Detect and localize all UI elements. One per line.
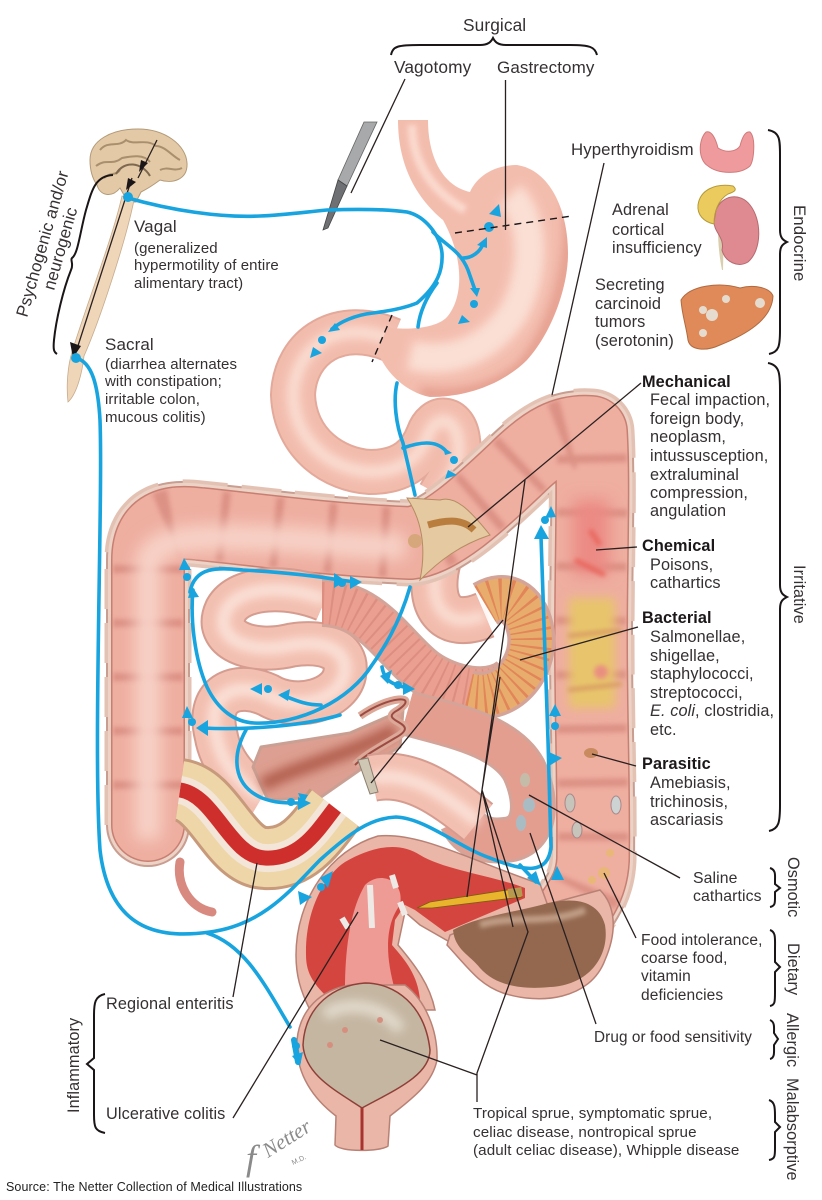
text: hyperthyroidism: Hyperthyroidism: [571, 140, 694, 159]
organ: ileum section: [253, 710, 403, 800]
regional enteritis: [180, 790, 335, 858]
text: bacterial: Salmonellae,: [650, 628, 745, 646]
cecum and appendix: [179, 862, 212, 912]
ileocecal clamp: [358, 758, 378, 794]
text: carcinoid: Secreting: [595, 276, 665, 294]
text: food intolerance: Food intolerance,: [641, 932, 762, 949]
organ: inflamed jejunum: [468, 599, 531, 696]
text: mechanical: Fecal impaction,: [650, 391, 770, 409]
organ: pale loop upper right: [434, 560, 485, 620]
text: bacterial: etc.: [650, 721, 677, 739]
text: mechanical: compression,: [650, 484, 748, 502]
text: bacterial: streptococci,: [650, 684, 743, 702]
text: bacterial: shigellae,: [650, 647, 720, 665]
text: chemical: Poisons,: [650, 556, 713, 574]
signature: Netter: [257, 1114, 316, 1163]
organ: ulcerative colitis rectosigmoid: [296, 836, 548, 1010]
text: bacterial: [642, 609, 774, 739]
signature: M.D.: [291, 1154, 308, 1167]
label inflammatory: Inflammatory: [65, 1017, 83, 1113]
text: mechanical: extraluminal: [650, 466, 739, 484]
text: mechanical: intussusception,: [650, 447, 768, 465]
text: bacterial: Bacterial: [642, 609, 712, 627]
text: bacterial: staphylococci,: [650, 665, 754, 683]
signature: f: [246, 1138, 261, 1178]
text: mechanical: foreign body,: [650, 410, 744, 428]
organ: stomach: [377, 120, 569, 397]
colon: bacterial inflammation: [568, 598, 622, 708]
icon: liver with carcinoid: [681, 285, 773, 349]
text: parasitic: trichinosis,: [650, 793, 728, 811]
brain: [90, 129, 187, 202]
text: mechanical: Mechanical: [642, 373, 731, 391]
brace malabsorptive: [769, 1100, 780, 1160]
heading: surgical: Surgical: [463, 15, 526, 35]
text: carcinoid: (serotonin): [595, 332, 674, 350]
text: bacterial: E. coli, clostridia,: [650, 702, 774, 720]
text: sacral: Sacral: [105, 335, 154, 354]
colon: mechanical obstruction tumor: [407, 498, 490, 580]
text: vagal: Vagal: [134, 217, 177, 236]
text: sacral: [104, 335, 237, 426]
text: chemical: cathartics: [650, 574, 721, 592]
text: adrenal: [612, 201, 702, 257]
text: adrenal: insufficiency: [612, 239, 702, 257]
organ: bladder shaped rectum: [297, 983, 437, 1150]
text: food intolerance: deficiencies: [641, 987, 723, 1004]
leader lines: [233, 79, 680, 1118]
text: carcinoid: carcinoid: [595, 295, 661, 313]
text: malabsorptive causes: (adult celiac disease), Whipple disease: [473, 1142, 739, 1159]
brace inflammatory: [87, 994, 105, 1133]
text: malabsorptive causes: [473, 1105, 739, 1159]
label malabsorptive: Malabsorptive: [783, 1078, 801, 1181]
heading: surgical: Gastrectomy: [497, 58, 595, 77]
label endocrine: Endocrine: [790, 205, 809, 281]
text: mechanical: neoplasm,: [650, 428, 726, 446]
colon: parasites and ulcers: [565, 748, 621, 884]
text: parasitic: Amebiasis,: [650, 774, 731, 792]
label: neurogenic: neurogenic: [40, 205, 81, 292]
text: vagal: (generalized: [134, 240, 218, 257]
heading: surgical: Vagotomy: [394, 57, 472, 77]
organ: ribbed small intestine: [322, 603, 512, 690]
text: vagal: hypermotility of entire: [134, 257, 279, 274]
organ: duodenum: [293, 332, 459, 495]
text: sacral: (diarrhea alternates: [105, 356, 237, 373]
text: regional enteritis: Regional enteritis: [106, 995, 234, 1013]
brace irritative: [768, 363, 787, 831]
worm parasites in ileum: [516, 773, 535, 831]
organ: intussusception fold: [355, 699, 406, 765]
blue arrowheads and nodes: [71, 192, 564, 1066]
text: ulcerative colitis: Ulcerative colitis: [106, 1105, 225, 1123]
text: parasitic: ascariasis: [650, 811, 723, 829]
brace: psychogenic: [54, 175, 113, 354]
spinal cord: [67, 196, 134, 402]
text: food intolerance: [641, 932, 762, 1004]
text: food intolerance: coarse food,: [641, 950, 728, 967]
text: mechanical: [642, 373, 770, 520]
text: mechanical: angulation: [650, 502, 726, 520]
label dietary: Dietary: [784, 943, 802, 996]
brace allergic: [770, 1020, 778, 1059]
text: adrenal: cortical: [612, 221, 664, 239]
text: carcinoid: tumors: [595, 313, 645, 331]
text: adrenal: Adrenal: [612, 201, 669, 219]
text: chemical: Chemical: [642, 537, 715, 555]
text: sacral: with constipation;: [104, 373, 222, 390]
text: sacral: mucous colitis): [105, 409, 206, 426]
dashed resection lines: [372, 216, 572, 362]
text: saline cathartics: Saline: [693, 870, 738, 887]
text: sacral: irritable colon,: [105, 391, 200, 408]
icon: adrenal and kidney: [698, 185, 759, 270]
label: psychogenic: Psychogenic and/or: [13, 168, 73, 319]
text: saline cathartics: cathartics: [693, 888, 762, 905]
text: food intolerance: vitamin: [641, 968, 691, 985]
organ: lower ileum: [407, 713, 533, 840]
blue autonomic pathways: [71, 192, 564, 1066]
organ: pale ileum segment: [372, 776, 478, 822]
nerve pathway arrows: [70, 140, 157, 358]
label allergic: Allergic: [783, 1013, 801, 1067]
organ: colon: [148, 432, 593, 915]
heading: surgical: [391, 15, 597, 77]
text: saline cathartics: [693, 870, 762, 905]
text: parasitic: [642, 755, 731, 829]
text: malabsorptive causes: celiac disease, nontropical sprue: [473, 1124, 697, 1141]
organ: pale small intestine loop: [214, 590, 345, 797]
text: drug sensitivity: Drug or food sensitivity: [594, 1029, 752, 1046]
scalpel: [323, 122, 377, 230]
text: carcinoid: [595, 276, 674, 350]
label osmotic: Osmotic: [784, 857, 802, 917]
icon: thyroid: [700, 132, 754, 172]
text: parasitic: Parasitic: [642, 755, 711, 773]
text: malabsorptive causes: Tropical sprue, symptomatic sprue,: [473, 1105, 712, 1122]
signature: [246, 1114, 316, 1178]
organ: brown sigmoid colon: [447, 890, 613, 999]
brace dietary: [770, 930, 780, 1006]
brace osmotic: [770, 868, 780, 907]
brace endocrine: [768, 130, 787, 354]
colon: chemical irritation: [575, 500, 605, 575]
text: vagal: [134, 217, 279, 292]
text: vagal: alimentary tract): [134, 275, 243, 292]
pencil: [417, 887, 523, 908]
text: chemical: [642, 537, 721, 592]
source: Source: The Netter Collection of Medical Illustrations: [6, 1180, 302, 1194]
label irritative: Irritative: [790, 565, 808, 624]
